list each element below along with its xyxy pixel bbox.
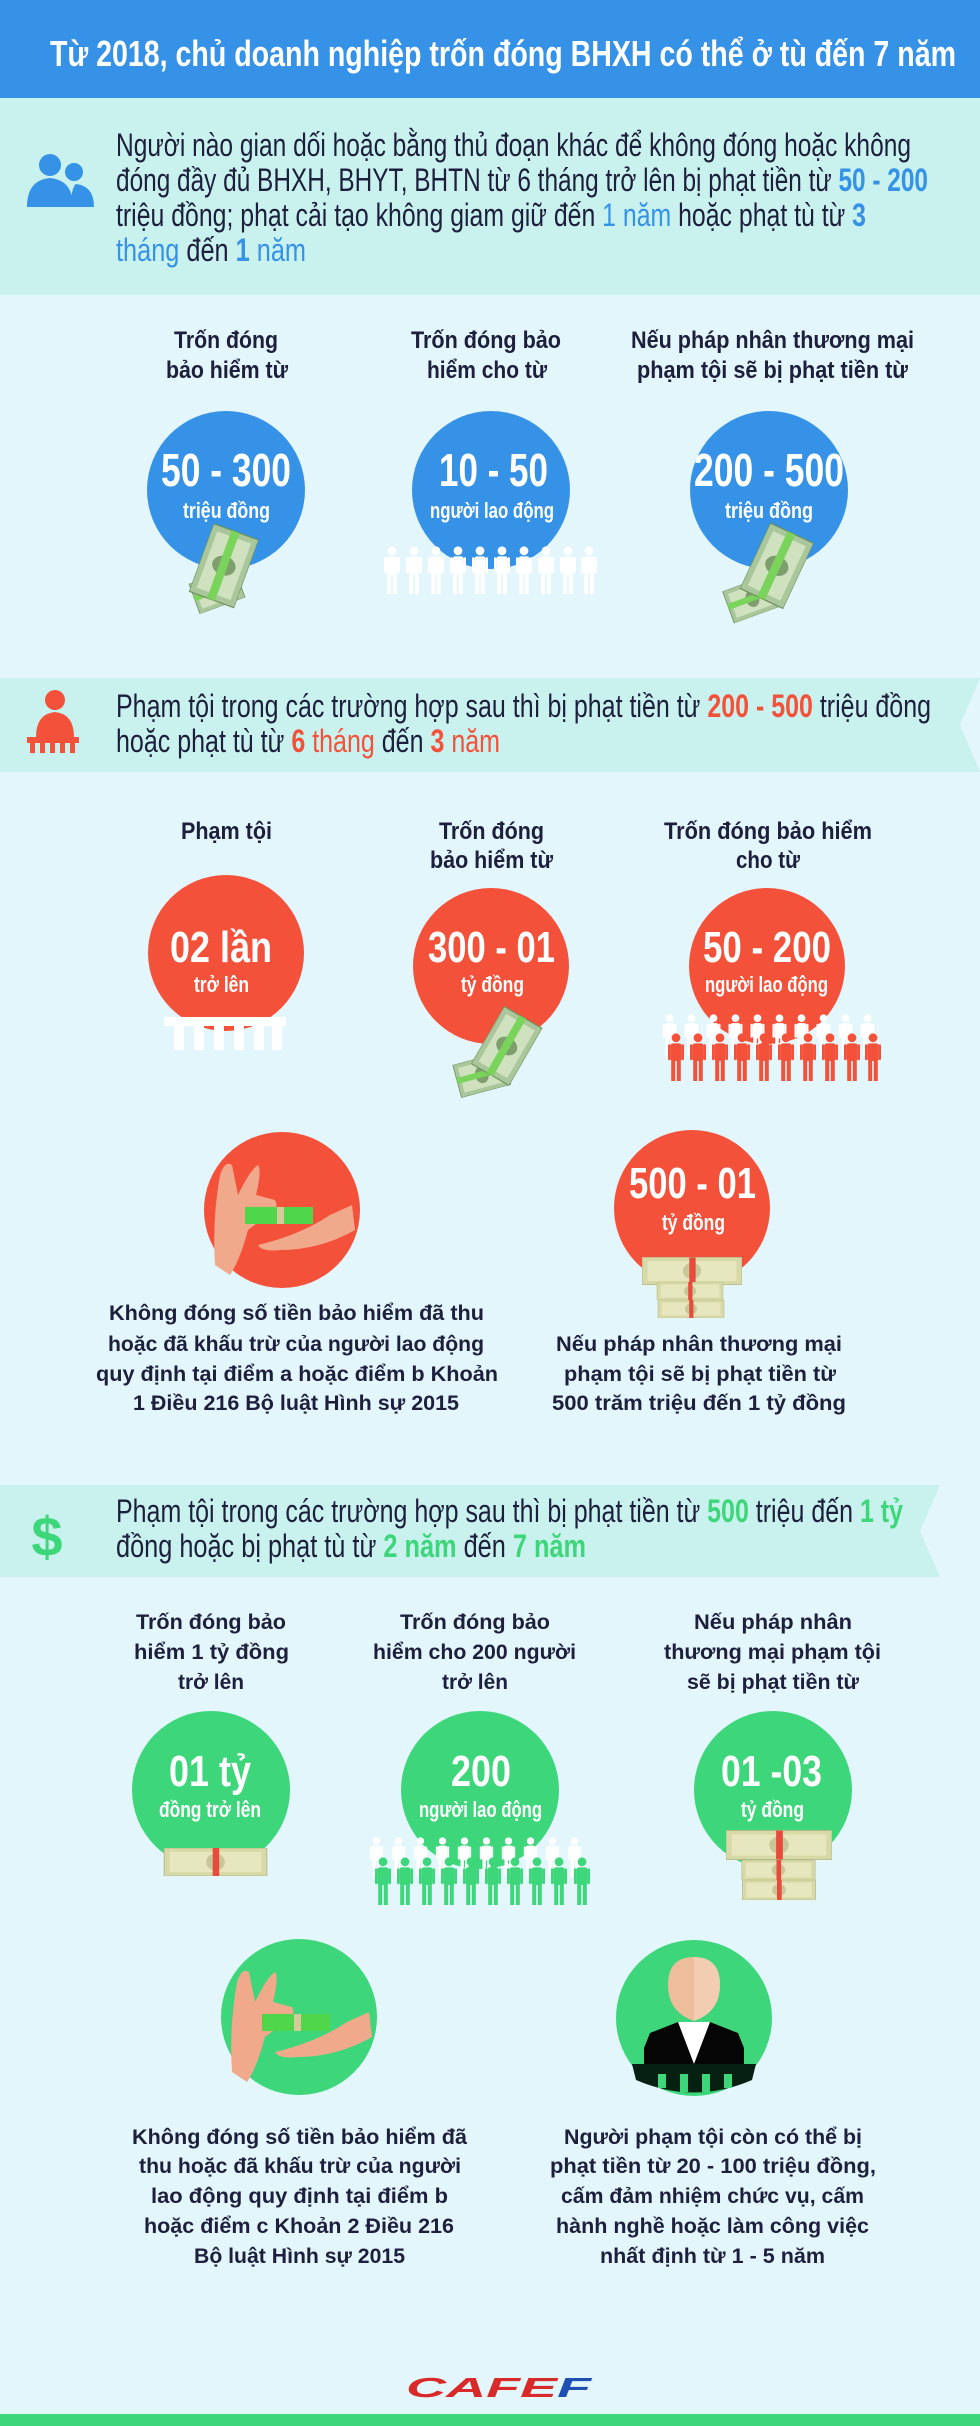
circle: judge: [616, 1940, 772, 2096]
text: bottom-right description section 2: [552, 1333, 846, 1415]
circle: 10-50 workers: [384, 411, 597, 594]
circle: 300-01 ty dong: tỷ đồng: [461, 972, 524, 997]
headers section 3: [134, 1611, 881, 1694]
text: bottom-right description section 3: nhất định từ 1 - 5 năm: [600, 2245, 825, 2268]
text: section 1 intro: [116, 127, 928, 268]
headers section 1: phạm tội sẽ bị phạt tiền từ: [637, 357, 909, 384]
circle: 50-200 workers: [662, 888, 881, 1081]
headers section 3: Nếu pháp nhân: [694, 1611, 852, 1634]
icon: defendant at bar: [27, 690, 79, 753]
text: bottom-right description section 2: phạm tội sẽ bị phạt tiền từ: [564, 1363, 837, 1386]
circle: 50-200 workers: 50 - 200: [703, 923, 831, 972]
circle: 01 ty: 01 tỷ: [169, 1747, 251, 1796]
text: section 2 intro: [116, 688, 931, 759]
text: bottom-left description section 3: hoặc điểm c Khoản 2 Điều 216: [144, 2215, 454, 2238]
icon: cash bundle: [164, 1848, 267, 1876]
headers section 2: Trốn đóng bảo hiểm: [664, 818, 872, 845]
icon: people rows: [370, 1837, 590, 1905]
headers section 1: Trốn đóng: [174, 327, 278, 354]
circle: 200-500 trieu dong: triệu đồng: [725, 498, 813, 523]
circle: 01-03 ty dong: 01 -03: [721, 1747, 822, 1796]
text: bottom-right description section 3: phạt tiền từ 20 - 100 triệu đồng,: [550, 2155, 876, 2178]
logo: CAFEF: CAFE F: [406, 2372, 593, 2403]
text: bottom-right description section 3: [550, 2126, 876, 2268]
text: bottom-right description section 2: Nếu pháp nhân thương mại: [556, 1333, 842, 1356]
circle: 50-300 trieu dong: triệu đồng: [183, 498, 270, 523]
headers section 3: trở lên: [178, 1671, 244, 1694]
circle: 01-03 ty dong: [694, 1711, 852, 1900]
text: section 2 intro: hoặc phạt tù từ 6 tháng đến 3 năm: [116, 723, 500, 759]
text: bottom-left description section 3: Bộ luật Hình sự 2015: [194, 2245, 405, 2268]
circle: 200-500 trieu dong: [690, 411, 848, 623]
headers section 1: [166, 327, 914, 384]
circle: 500-01 ty dong: [614, 1130, 770, 1318]
circle: 500-01 ty dong: 500 - 01: [629, 1159, 756, 1208]
circle: 02 lan tro len: 02 lần: [170, 923, 272, 972]
headers section 2: cho từ: [736, 847, 801, 874]
text: bottom-left description section 3: lao động quy định tại điểm b: [151, 2185, 448, 2208]
text: bottom-left description section 2: hoặc đã khấu trừ của người lao động: [108, 1333, 484, 1356]
icon: cash bundle: [726, 1831, 832, 1900]
text: bottom-left description section 2: 1 Điều 216 Bộ luật Hình sự 2015: [133, 1392, 459, 1415]
circle: hands passing money (green): [221, 1939, 377, 2095]
icon: railing: [164, 1017, 286, 1050]
text: bottom-left description section 3: Không đóng số tiền bảo hiểm đã: [132, 2126, 467, 2149]
text: section 2 intro: Phạm tội trong các trường hợp sau thì bị phạt tiền từ 200 - 500 triệu đồng: [116, 688, 931, 724]
headers section 3: sẽ bị phạt tiền từ: [687, 1671, 860, 1694]
circle: 200 workers: [370, 1711, 590, 1905]
circle: 200 workers: 200: [451, 1747, 511, 1796]
panel: section 2 band: [0, 678, 980, 772]
circle: 50-300 trieu dong: [147, 411, 305, 614]
circle: 01 ty: đồng trở lên: [159, 1797, 261, 1822]
icon: people row: [384, 546, 597, 594]
circle: 10-50 workers: 10 - 50: [439, 444, 548, 496]
headers section 2: bảo hiểm từ: [430, 847, 554, 874]
text: section 1 intro: tháng đến 1 năm: [116, 232, 306, 268]
circle: 50-300 trieu dong: 50 - 300: [161, 444, 291, 496]
circle: 50-200 workers: người lao động: [705, 972, 828, 997]
headers section 3: thương mại phạm tội: [664, 1641, 881, 1664]
headers section 2: Phạm tội: [181, 818, 272, 845]
icon: dollar sign: $: [31, 1505, 63, 1568]
circle: 01-03 ty dong: tỷ đồng: [741, 1797, 804, 1822]
headers section 3: Trốn đóng bảo: [400, 1611, 550, 1634]
text: section 3 intro: Phạm tội trong các trường hợp sau thì bị phạt tiền từ 500 triệu đến 1 tỷ: [116, 1493, 903, 1529]
icon: money stack: [189, 524, 259, 614]
icon: money stack: [723, 523, 814, 623]
headers section 1: hiểm cho từ: [427, 357, 548, 384]
headers section 3: hiểm 1 tỷ đồng: [134, 1641, 289, 1664]
icon: people rows: [662, 1014, 881, 1081]
headers section 3: hiểm cho 200 người: [373, 1641, 576, 1664]
icon: money stack: [453, 1006, 542, 1098]
headers section 2: [181, 818, 872, 874]
icon: cash bundle: [642, 1257, 742, 1318]
circle: 200-500 trieu dong: 200 - 500: [694, 444, 844, 496]
circle: 500-01 ty dong: tỷ đồng: [662, 1210, 725, 1235]
text: bottom-left description section 3: [132, 2126, 467, 2268]
circle: 10-50 workers: người lao động: [430, 498, 554, 523]
circle: 01 ty: [132, 1711, 290, 1876]
text: bottom-left description section 2: Không đóng số tiền bảo hiểm đã thu: [109, 1302, 484, 1325]
text: section 3 intro: đồng hoặc bị phạt tù từ 2 năm đến 7 năm: [116, 1528, 586, 1564]
circle: 300-01 ty dong: 300 - 01: [428, 923, 555, 972]
text: section 1 intro: triệu đồng; phạt cải tạo không giam giữ đến 1 năm hoặc phạt tù từ 3: [116, 197, 866, 233]
text: bottom-left description section 2: [96, 1302, 498, 1415]
circle: 02 lan tro len: [148, 875, 304, 1050]
text: bottom-right description section 2: 500 trăm triệu đến 1 tỷ đồng: [552, 1392, 846, 1415]
title bar: [0, 0, 980, 98]
text: bottom-right description section 3: hành nghề hoặc làm công việc: [556, 2215, 869, 2238]
panel: section 1 band: [0, 98, 980, 295]
text: bottom-left description section 3: thu hoặc đã khấu trừ của người: [139, 2155, 461, 2178]
text: bottom-right description section 3: cấm đảm nhiệm chức vụ, cấm: [561, 2185, 864, 2208]
headers section 3: Trốn đóng bảo: [136, 1611, 286, 1634]
text: bottom-left description section 2: quy định tại điểm a hoặc điểm b Khoản: [96, 1363, 498, 1386]
headers section 3: trở lên: [442, 1671, 508, 1694]
panel: section 3 band: [0, 1485, 940, 1577]
text: bottom-right description section 3: Người phạm tội còn có thể bị: [564, 2126, 862, 2149]
circle: 02 lan tro len: trở lên: [194, 972, 249, 997]
headers section 2: Trốn đóng: [439, 818, 544, 845]
circle: hands passing money (red): [204, 1132, 360, 1288]
text: section 3 intro: [116, 1493, 903, 1564]
icon: two people: [27, 154, 94, 207]
circle: 300-01 ty dong: [413, 888, 569, 1098]
headers section 1: Trốn đóng bảo: [411, 327, 561, 354]
circle: 200 workers: người lao động: [419, 1797, 542, 1822]
headers section 1: bảo hiểm từ: [166, 357, 289, 384]
headers section 1: Nếu pháp nhân thương mại: [631, 327, 914, 354]
